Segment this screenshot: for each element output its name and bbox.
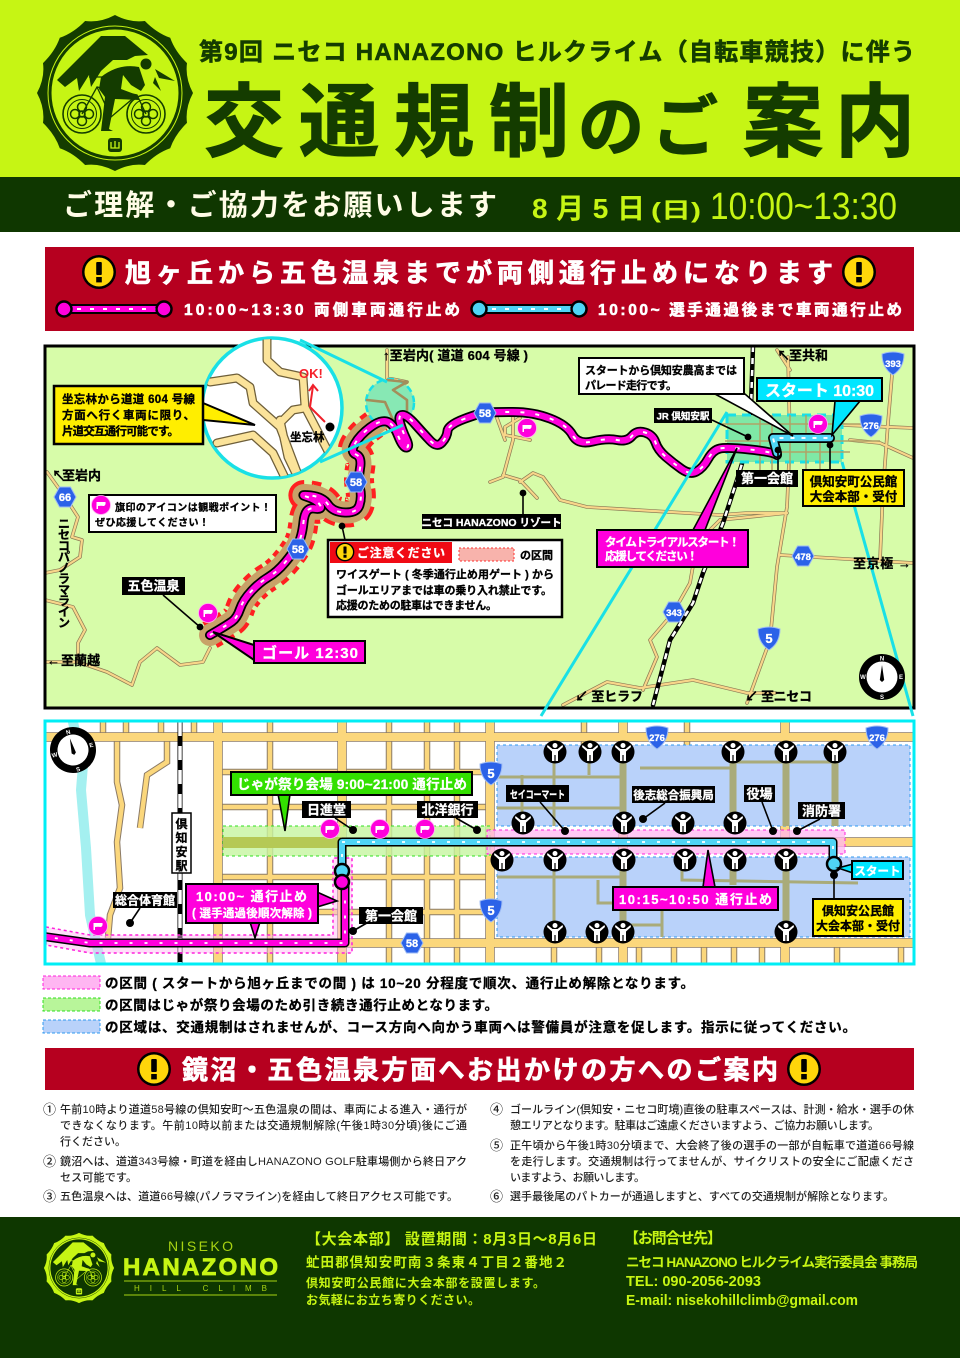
lens arrow: [309, 385, 325, 422]
map: overall course: [45, 346, 914, 708]
header subtitle band: [0, 177, 960, 232]
route sign 478: [792, 546, 814, 566]
callout: one-lane note: 坐忘林から道道 604 号線: [62, 392, 196, 406]
lens connector lines: [300, 340, 403, 462]
route sign 276 left: 276: [649, 733, 665, 744]
notes: left column: できなくなります。午前10時以前または交通規制解除(午後1時30分頃)後にご通: [60, 1118, 467, 1132]
label: resort: [422, 493, 562, 529]
river: [72, 718, 102, 968]
icon: warning left: [137, 1052, 171, 1086]
route sign 5: [758, 627, 780, 650]
direction: Rankoshi: 至蘭越: [61, 653, 100, 668]
label: Seicomart: セイコーマート: [510, 789, 565, 801]
footer wordmark: HILL CLIMB: [134, 1284, 267, 1293]
note: spectator flag: [89, 495, 276, 532]
date and time: 8月5日: [532, 193, 645, 224]
callout: time trial: [597, 448, 748, 567]
zone: pink band east: [487, 830, 845, 854]
compass: main map: W: [860, 675, 866, 681]
route sign 343: 343: [666, 608, 682, 619]
notes: left column: 鏡沼へは、道道343号線・町道を経由しHANAZONO GOLF駐車場側から終日アク: [60, 1154, 467, 1168]
caution title: ご注意ください: [357, 545, 445, 560]
callout: 10:00 closure: [186, 884, 337, 938]
lens roads: [210, 335, 330, 482]
note: spectator flag: 旗印のアイコンは観戦ポイント！: [115, 501, 271, 514]
footer wordmark: NISEKO: [168, 1238, 233, 1254]
callout: festival closure: [231, 772, 472, 831]
direction: Kyowa: ↖: [777, 348, 790, 363]
route sign 5: 5: [765, 631, 773, 646]
magnifier lens: [202, 335, 342, 482]
zone: pink band west: [46, 858, 352, 953]
date and time: [532, 186, 897, 228]
route sign 276 left: [646, 726, 668, 749]
icon: flag centre: [370, 820, 390, 838]
callout: parade: スタートから倶知安農高までは: [585, 363, 737, 377]
callout: parade: パレード走行です。: [585, 378, 677, 392]
label: Daiichi Kaikan inset: 第一会館: [365, 908, 417, 924]
label: fire station: [797, 802, 845, 831]
footer logo: [44, 1233, 114, 1303]
route sign 276 right: [866, 726, 888, 749]
compass: inset: S: [76, 767, 81, 774]
notes: right column: ⑥: [490, 1189, 503, 1204]
marker: start: [827, 857, 841, 871]
icon: flag mid course: [518, 418, 536, 438]
label: fire station: 消防署: [802, 804, 841, 818]
compass: inset: [45, 722, 101, 779]
subtitle: request: ご理解・ご協力をお願いします: [63, 188, 497, 222]
label: Nisshindo: 日進堂: [307, 802, 346, 818]
compass: inset: E: [89, 743, 94, 749]
inset border: [45, 721, 914, 964]
route sign 276: 276: [863, 421, 879, 432]
footer band: [0, 1217, 960, 1358]
lens place name: 坐忘林: [290, 430, 325, 444]
callout: one-lane note: 片道交互通行可能です。: [62, 424, 179, 438]
caution body: ワイスゲート ( 冬季通行止め用ゲート ) から: [336, 567, 554, 581]
label: station: [172, 813, 191, 873]
footer: headquarters info: 虻田郡倶知安町南３条東４丁目２番地２: [306, 1254, 567, 1270]
icon: flag bank: [416, 820, 434, 838]
footer wordmark: HANAZONO: [123, 1254, 278, 1281]
banner: access info: [45, 1048, 914, 1090]
route sign 58 C: [474, 403, 496, 423]
notes: left column: [43, 1102, 467, 1204]
route sign 5 lower: 5: [487, 903, 495, 918]
label: JR station: [654, 408, 748, 437]
zone: junction circle: [366, 379, 414, 427]
date and time: (日): [651, 198, 701, 223]
caution body: ゴールエリアまでは車の乗り入れ禁止です。: [336, 583, 552, 597]
direction: Kyowa: 至共和: [789, 348, 828, 363]
label: Hokuyo Bank: 北洋銀行: [421, 802, 474, 818]
route sign 58 A: [287, 539, 309, 559]
compass: main map: E: [899, 675, 903, 681]
label: Daiichi Kaikan inset: [353, 907, 423, 931]
footer: contact: ニセコ HANAZONO ヒルクライム実行委員会 事務局: [626, 1254, 918, 1270]
caution body: [336, 567, 554, 612]
label: Shiribeshi office: [632, 786, 715, 819]
notes: left column: ②: [43, 1154, 56, 1169]
dots on route: [197, 434, 833, 630]
callout: 10:15 closure: [613, 850, 778, 910]
zone: town centre: [720, 415, 880, 470]
banner heading: 旭ヶ丘から五色温泉までが両側通行止めになります: [125, 258, 833, 288]
route sign 58 B: 58: [350, 477, 362, 489]
notes: right column: ⑤: [490, 1138, 503, 1153]
zone: blue lower: [497, 857, 910, 937]
thin roads: [45, 720, 914, 964]
callout: 10:00 closure: 10:00~ 通行止め: [196, 889, 307, 904]
route sign 276 right: 276: [869, 733, 885, 744]
banner heading: 鏡沼・五色温泉方面へお出かけの方へのご案内: [182, 1055, 778, 1085]
footer: contact: [624, 1230, 918, 1309]
marker: time-trial transition: [335, 864, 349, 889]
footer: headquarters info: お気軽にお立ち寄りください。: [306, 1292, 480, 1307]
route sign 5 upper: 5: [487, 766, 495, 781]
map border: [45, 346, 914, 708]
label: headquarters inset: [813, 875, 903, 936]
course: magenta route: [210, 412, 777, 635]
icon: flag Nisshindo: [320, 820, 340, 838]
label: headquarters: [803, 445, 904, 506]
location dots: [126, 815, 838, 935]
icon: caution warning: [336, 543, 354, 561]
direction: Hirafu: ↙ 至ヒラフ: [575, 689, 643, 704]
label: town hall: [744, 785, 775, 831]
label: Nisshindo: [302, 801, 353, 830]
route sign 58 C: 58: [479, 408, 491, 420]
callout: start time: スタート 10:30: [765, 382, 874, 400]
panel: caution: [328, 526, 562, 617]
callout: time trial: 応援してください！: [605, 550, 698, 563]
route sign 66: 66: [59, 492, 71, 504]
notes: left column: 午前10時より道道58号線の倶知安町～五色温泉の間は、車両による進入・通行が: [60, 1102, 467, 1116]
map: town inset: [40, 718, 914, 968]
label: resort: ニセコ HANAZONO リゾート: [422, 517, 562, 529]
direction: Iwanai west: 至岩内: [62, 468, 101, 483]
lens OK: OK!: [299, 366, 323, 381]
label: headquarters: 倶知安町公民館: [810, 474, 897, 489]
callout: start inset: [838, 861, 903, 879]
callout: start inset: スタート: [854, 865, 900, 878]
title: 交通規制のご 案内: [204, 78, 915, 167]
notes: left column: セス可能です。: [60, 1170, 137, 1184]
legend: pink zone: の区間 ( スタートから旭ヶ丘までの間 ) は 10~20 分程度で順次、通行止め解除となります。: [105, 975, 694, 991]
callout: festival closure: じゃが祭り会場 9:00~21:00 通行止め: [237, 776, 467, 792]
notes: right column: 憩エリアとなります。駐車はご遠慮くださいますよう、ご協力お願いします。: [510, 1118, 879, 1132]
callout: one-lane note: [54, 386, 255, 444]
header band: [0, 0, 960, 177]
label: gymnasium: 総合体育館: [115, 892, 175, 908]
heading: event name: 第9回 ニセコ HANAZONO ヒルクライム（自転車競技）に伴う: [199, 39, 915, 66]
notes: right column: 正午頃から午後1時30分頃まで、大会終了後の選手の一部が自転車で道道66号線: [510, 1138, 914, 1152]
swatch: caution zone: [459, 548, 514, 561]
note: spectator flag: ぜひ応援してください！: [95, 516, 209, 529]
legend: blue zone: の区域は、交通規制はされませんが、コース方向へ向かう車両へは警備員が注意を促します。指示に従ってください。: [105, 1019, 856, 1035]
compass: inset: W: [51, 752, 59, 760]
notes: right column: 選手最後尾のパトカーが通過しますと、すべての交通規制が解除となります。: [510, 1189, 894, 1203]
notes: left column: 行ください。: [60, 1135, 126, 1148]
callout: parade: [579, 358, 793, 436]
route sign 5 upper: [480, 762, 502, 785]
inset route cyan: [342, 842, 833, 872]
route sign 66: [54, 487, 76, 507]
compass: main map: N: [880, 656, 884, 662]
railway: [178, 722, 182, 964]
inset connector lines: [541, 412, 913, 716]
label: Daiichi Kaikan: 第一会館: [741, 471, 793, 486]
callout: 10:15 closure: 10:15~10:50 通行止め: [619, 892, 772, 907]
notes: right column: いますよう、お願いします。: [510, 1171, 645, 1184]
label: Shiribeshi office: 後志総合振興局: [633, 788, 714, 802]
icon: flag legend: [92, 496, 110, 514]
label: Goshiki Onsen: 五色温泉: [127, 578, 180, 594]
route sign 5 lower: [480, 899, 502, 922]
route sign 393: [882, 352, 904, 375]
direction: Rankoshi: ←: [47, 653, 60, 668]
notes: left column: ①: [43, 1102, 56, 1117]
lens dot: [326, 422, 334, 432]
notes: left column: 五色温泉へは、道道66号線(パノラマライン)を経由して終日アクセス可能です。: [60, 1189, 458, 1203]
footer wordmark: [123, 1238, 278, 1295]
notes: right column: [490, 1102, 914, 1204]
route sign 276: [860, 414, 882, 437]
legend: green zone: の区間はじゃが祭り会場のため引き続き通行止めとなります。: [105, 997, 498, 1013]
label: Goshiki Onsen: [122, 577, 200, 627]
course: cyan route: [773, 438, 830, 453]
icon: flag at goal: [198, 604, 218, 622]
route sign 393: 393: [885, 359, 901, 370]
label: Hokuyo Bank: [417, 801, 478, 830]
footer: contact: TEL: 090-2056-2093: [626, 1274, 761, 1290]
label: headquarters inset: 大会本部・受付: [816, 918, 900, 933]
callout: 10:00 closure: ( 選手通過後順次解除 ): [192, 906, 312, 920]
notes: left column: ③: [43, 1189, 56, 1204]
zone: blue upper: [497, 745, 910, 826]
banner: road closure notice: [45, 247, 914, 331]
roads: [45, 346, 913, 705]
legend: magenta text: 10:00~13:30 両側車両通行止め: [184, 301, 460, 319]
route sign 58 inset: 58: [406, 938, 418, 950]
notes: right column: を走行します。交通規制は行ってませんが、サイクリストの安全にご配慮くださ: [510, 1154, 914, 1168]
compass: main map: S: [880, 695, 884, 701]
route sign 478: 478: [795, 552, 811, 563]
notes: right column: ④: [490, 1102, 503, 1117]
route sign 58 inset: [401, 933, 423, 953]
legend: magenta line: [56, 302, 172, 316]
inset streets: [45, 718, 914, 968]
compass: main map: [859, 654, 905, 701]
road name vertical: ニセコパノラマライン: [58, 517, 70, 630]
compass: inset: N: [66, 730, 71, 737]
label: JR station: JR 倶知安駅: [657, 410, 710, 422]
icon: flag near start: [808, 414, 828, 434]
label: headquarters inset: 倶知安公民館: [822, 903, 894, 918]
callout: time trial: タイムトライアルスタート！: [605, 536, 740, 549]
inset route magenta: [40, 882, 345, 943]
icon: flag gym: [88, 916, 108, 936]
footer: headquarters info: 【大会本部】 設置期間：8月3日〜8月6日: [306, 1230, 597, 1248]
zone: festival closure: [223, 826, 490, 856]
footer: contact: E-mail: nisekohillclimb@gmail.com: [626, 1293, 858, 1309]
legend: cyan line: [472, 302, 586, 316]
swatch label: の区間: [520, 549, 553, 562]
callout: start time: [757, 378, 882, 435]
label: station: 倶知安駅: [175, 816, 188, 873]
direction: Niseko: ↙ 至ニセコ: [745, 689, 812, 704]
road: at junction: [367, 380, 407, 420]
icons: traffic guards: [490, 740, 846, 944]
footer: contact: 【お問合せ先】: [624, 1230, 722, 1247]
label: Seicomart: [506, 785, 569, 831]
date and time: 10:00~13:30: [710, 186, 897, 228]
legend: cyan text: 10:00~ 選手通過後まで車両通行止め: [598, 300, 902, 319]
caution header: [330, 542, 452, 563]
callout: goal: [213, 632, 365, 663]
route sign 58 B: [345, 472, 367, 492]
label: Daiichi Kaikan: [736, 450, 798, 487]
caution body: 応援のための駐車はできません。: [336, 598, 497, 612]
label: headquarters: 大会本部・受付: [810, 489, 898, 504]
label: town hall: 役場: [746, 786, 773, 802]
icon: warning left: [82, 255, 116, 289]
label: gymnasium: [113, 892, 177, 923]
direction: Iwanai west: ↖: [52, 468, 65, 483]
callout: goal: ゴール 12:30: [262, 644, 358, 662]
direction: Iwanai north: ↑至岩内( 道道 604 号線 ): [383, 348, 528, 363]
route sign 343: [663, 602, 685, 622]
event logo: [37, 15, 193, 171]
footer: headquarters info: 倶知安町公民館に大会本部を設置します。: [306, 1275, 545, 1290]
direction: Kyogoku: 至京極 →: [853, 556, 911, 571]
route sign 58 A: 58: [292, 544, 304, 556]
zone: caution band: [210, 420, 380, 635]
icon: warning right: [842, 255, 876, 289]
notes: right column: ゴールライン(倶知安・ニセコ町境)直後の駐車スペースは、計測・給水・選手の休: [510, 1102, 914, 1116]
footer: headquarters info: [306, 1230, 597, 1307]
callout: one-lane note: 方面へ行く車両に限り、: [62, 408, 195, 422]
icon: warning right: [787, 1052, 821, 1086]
